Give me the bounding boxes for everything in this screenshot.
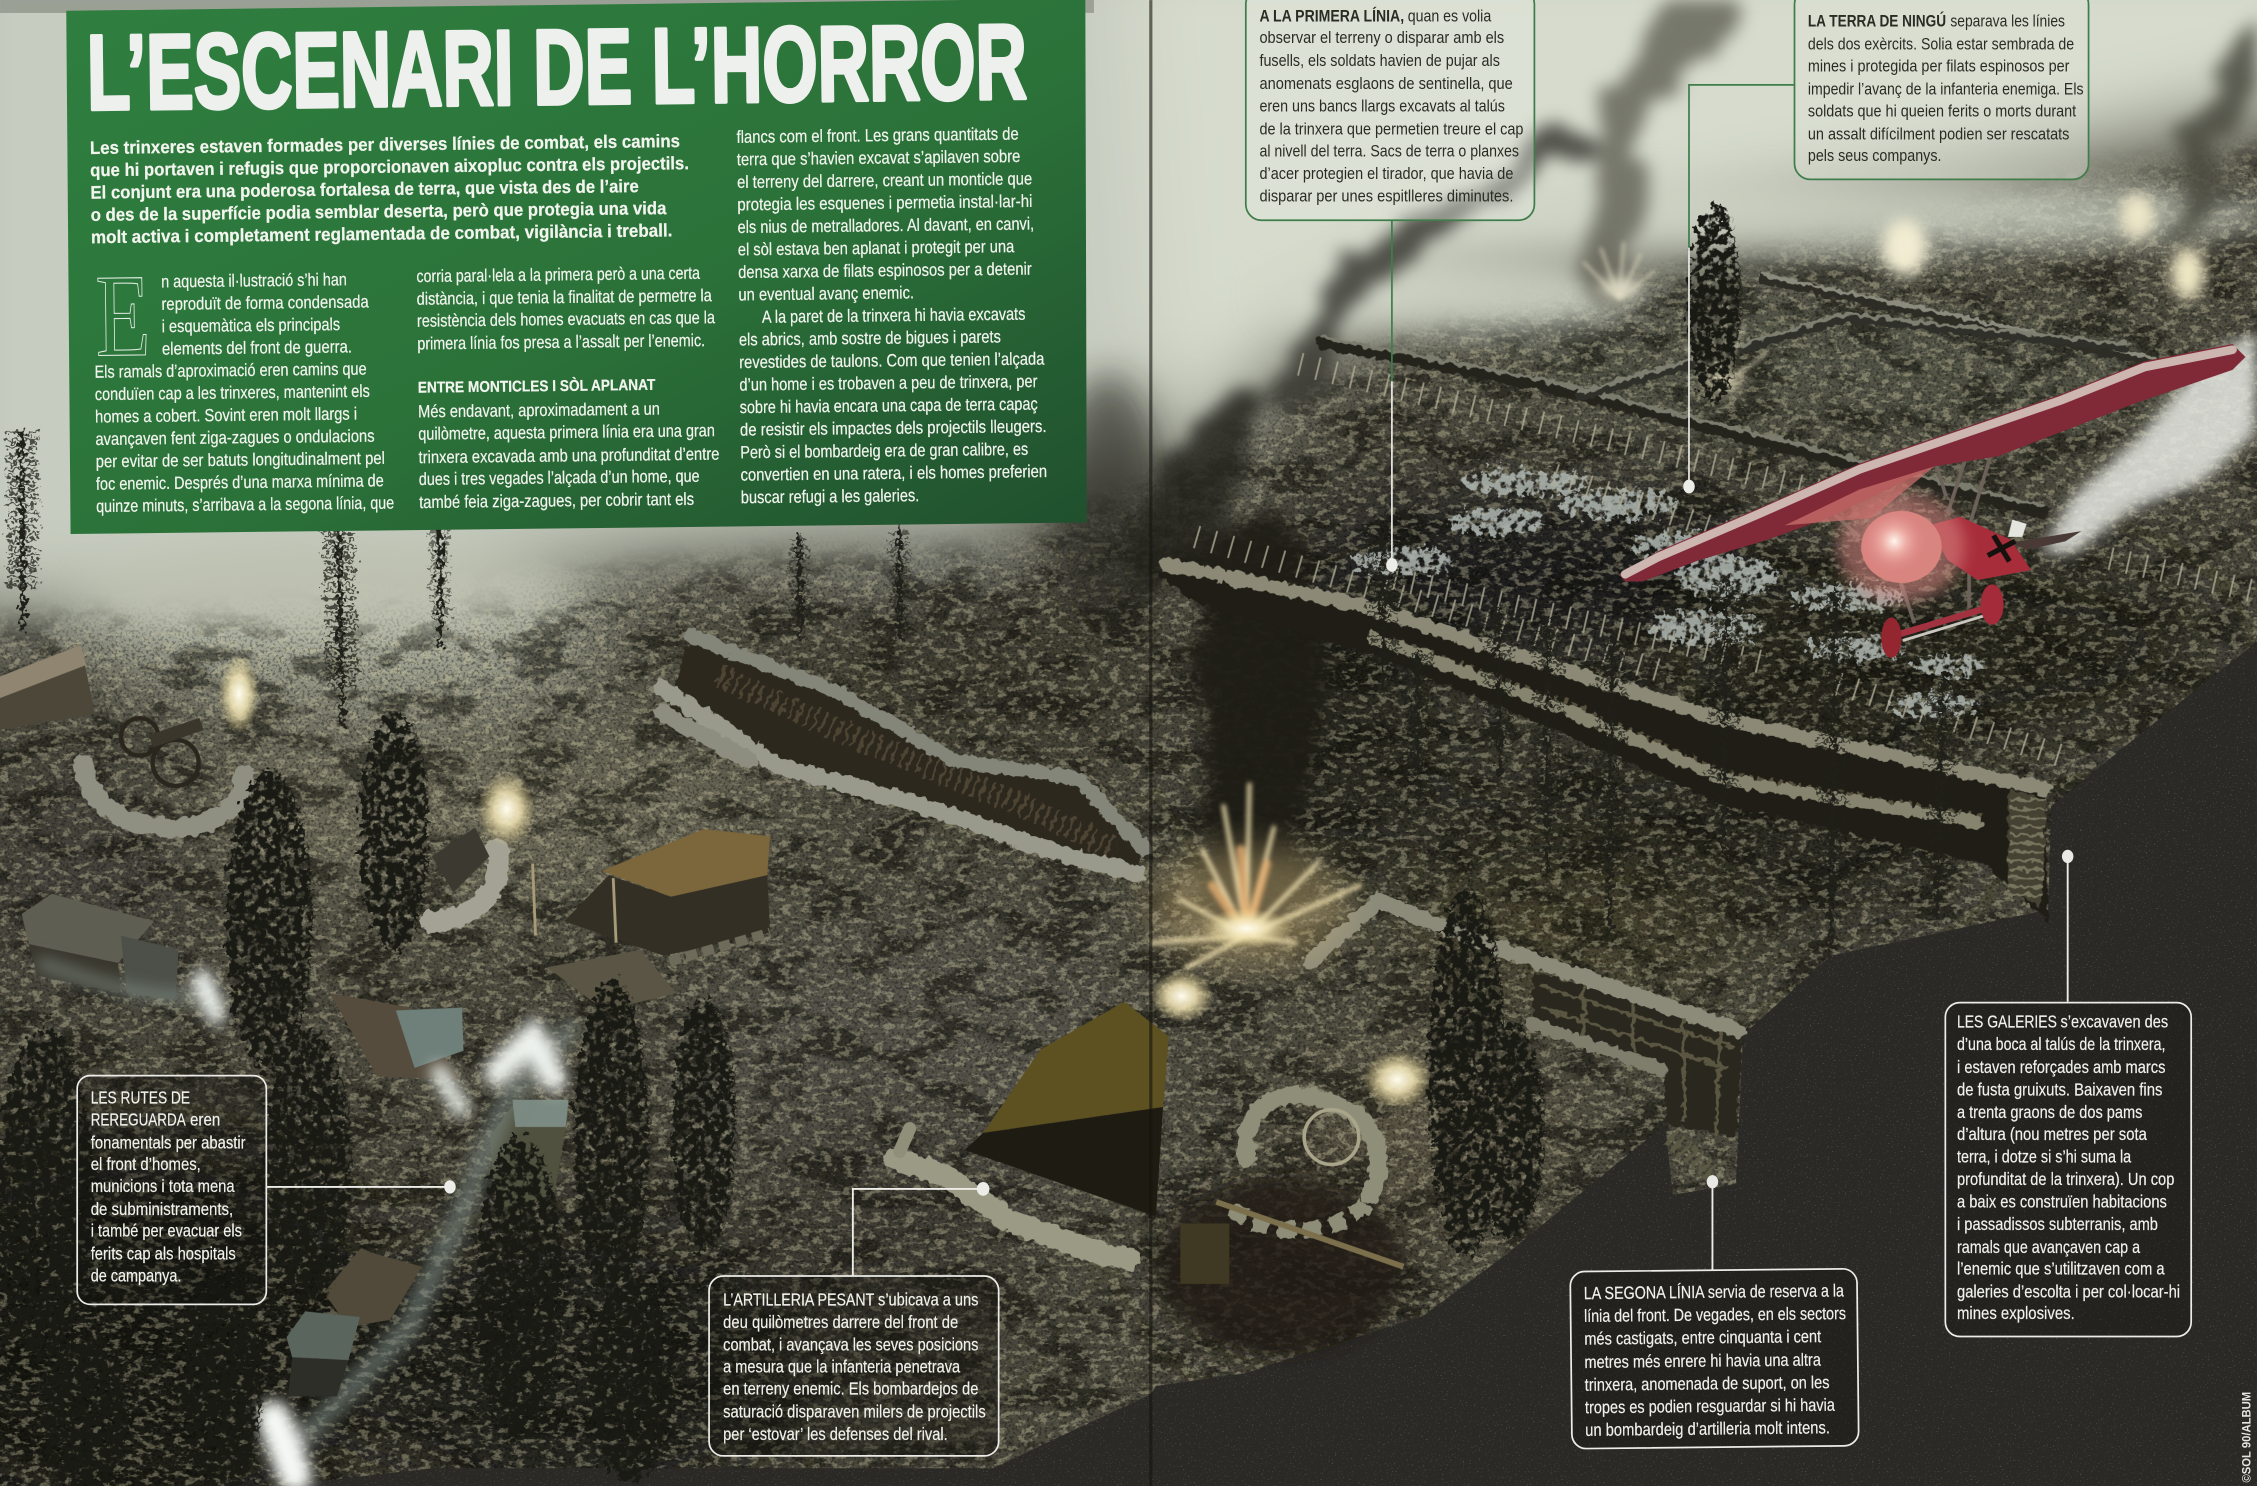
callout: les galeries: profunditat de la trinxera). Un cop xyxy=(1957,1169,2175,1189)
callout: les galeries: d’altura (nou metres per sota xyxy=(1957,1124,2147,1144)
column 1: elements del front de guerra. xyxy=(162,336,352,359)
callout: l'artilleria pesant: a mesura que la infanteria penetrava xyxy=(723,1357,960,1377)
callout: l'artilleria pesant: combat, i avançava les seves posicions xyxy=(723,1335,979,1355)
struts xyxy=(1819,443,1992,623)
callout: la segona línia: servia de reserva a la xyxy=(1708,1280,1844,1302)
column 1: foc enemic. Després d’una marxa mínima de xyxy=(96,470,384,494)
far trenches xyxy=(1321,275,2155,512)
column 1: Els ramals d’aproximació eren camins que xyxy=(94,359,367,382)
column 3: els abrics, amb sostre de bigues i parets xyxy=(739,326,1001,350)
callout: les rutes de rereguarda: de subministraments, xyxy=(91,1199,233,1219)
pale mud patches in no man's land xyxy=(1354,469,1986,717)
upper wing xyxy=(1619,344,2245,582)
callout: l'artilleria pesant: per ‘estovar’ les defenses del rival. xyxy=(723,1424,948,1444)
column 3 xyxy=(736,123,1047,507)
callout: les rutes de rereguarda: el front d’homes, xyxy=(91,1154,201,1174)
fog over the far fields xyxy=(86,181,2257,630)
intro text xyxy=(90,131,690,247)
callout: les galeries xyxy=(1945,850,2191,1336)
column 3: d’un home i es trobaven a peu de trinxera, per xyxy=(739,371,1038,395)
field gun with sandbags, centre xyxy=(432,828,498,921)
column 3: un eventual avanç enemic. xyxy=(738,282,914,304)
callout: les rutes de rereguarda: eren xyxy=(190,1110,220,1130)
field gun with sandbags, upper left xyxy=(84,718,245,828)
callout: les galeries: LES GALERIES xyxy=(1957,1011,2057,1031)
callout: a la primera línia: quan es volia xyxy=(1408,7,1492,26)
callout: la segona línia: més castigats, entre cinquanta i cent xyxy=(1584,1326,1821,1349)
callout: les galeries: ramals que avançaven cap a xyxy=(1957,1237,2140,1257)
engine glow xyxy=(1838,492,1965,602)
callout: a la primera línia: anomenats esglaons de sentinella, que xyxy=(1259,74,1513,93)
front trench on the right page xyxy=(1152,564,2048,921)
column 1 xyxy=(93,269,394,516)
column 2: ENTRE MONTICLES I SÒL APLANAT xyxy=(418,376,656,397)
column 2: distància, i que tenia la finalitat de permetre la xyxy=(417,285,712,309)
hut, left edge xyxy=(0,645,95,730)
callout: la terra de ningú: separava les línies xyxy=(1950,12,2065,31)
callout: les galeries: a baix es construïen habitacions xyxy=(1957,1192,2167,1212)
cypress trees xyxy=(0,202,1742,1486)
second line trench near the cut xyxy=(1310,901,1743,1173)
callout: les rutes de rereguarda: de campanya. xyxy=(91,1266,181,1286)
callout: les galeries: a trenta graons de dos pams xyxy=(1957,1102,2143,1122)
intro text: Les trinxeres estaven formades per diverses línies de combat, els camins xyxy=(90,131,680,158)
photo credit: ©SOL 90/ALBUM xyxy=(2239,1392,2253,1483)
tent and sandbag wall near the spine xyxy=(895,1002,1169,1259)
callout: la terra de ningú: pels seus companys. xyxy=(1808,146,1941,165)
callout: a la primera línia: fusells, els soldats havien de pujar als xyxy=(1259,51,1500,70)
column 3: protegia les esquenes i permetia instal·lar-hi xyxy=(737,191,1032,214)
column 2: Més endavant, aproximadament a un xyxy=(418,399,660,421)
callout: la segona línia: línia del front. De vegades, en els sectors xyxy=(1584,1303,1846,1326)
column 3: densa xarxa de filats espinosos per a detenir xyxy=(738,259,1032,282)
callout: les galeries: galeries d’escolta i per col·locar-hi xyxy=(1957,1281,2180,1301)
column 3: el sòl estava ben aplanat i protegit per una xyxy=(738,236,1015,259)
callout: l'artilleria pesant: L’ARTILLERIA PESANT xyxy=(723,1290,875,1310)
callout: les galeries: de fusta gruixuts. Baixaven fins xyxy=(1957,1079,2163,1099)
column 3: sobre hi havia encara una capa de terra capaç xyxy=(740,394,1038,417)
callout: a la primera línia: disparar per unes espitlleres diminutes. xyxy=(1259,187,1513,206)
column 3: buscar refugi a les galeries. xyxy=(741,485,919,507)
tent with camouflage net, left xyxy=(533,829,770,1010)
callout: a la primera línia: A LA PRIMERA LÍNIA, xyxy=(1259,7,1404,26)
tail and rudder xyxy=(2011,531,2081,550)
callout: la terra de ningú: soldats que hi queien ferits o morts durant xyxy=(1808,102,2076,121)
column 3: de resistir els impactes dels projectils lleugers. xyxy=(740,416,1047,440)
column 2: quilòmetre, aquesta primera línia era una gran xyxy=(418,420,715,444)
bottom truck xyxy=(286,1249,422,1396)
title: L’ESCENARI DE L’HORROR xyxy=(86,2,1028,132)
callout: la segona línia: un bombardeig d’artilleria molt intens. xyxy=(1585,1417,1830,1440)
intro text: El conjunt era una poderosa fortalesa de terra, que vista des de l’aire xyxy=(90,176,639,203)
callout: a la primera línia: de la trinxera que permetien treure el cap xyxy=(1259,119,1523,138)
column 3: convertien en una ratera, i els homes preferien xyxy=(740,461,1047,485)
column 1: homes a cobert. Sovint eren molt llargs i xyxy=(95,403,357,427)
white smoke behind the plane xyxy=(2040,331,2257,554)
callout: l'artilleria pesant xyxy=(709,1182,999,1456)
column 2 xyxy=(416,263,720,512)
smoke columns xyxy=(1159,0,2257,878)
callout: la terra de ningú: dels dos exèrcits. Solia estar sembrada de xyxy=(1808,34,2074,53)
muzzle flashes xyxy=(219,653,1432,1108)
callout: la terra de ningú: un assalt difícilment podien ser rescatats xyxy=(1808,124,2069,143)
callout: la terra de ningú xyxy=(1683,0,2089,493)
column 2: dues i tres vegades l’alçada d’un home, que xyxy=(419,466,700,489)
column 1: quinze minuts, s’arribava a la segona línia, que xyxy=(96,493,394,516)
intro text: molt activa i completament reglamentada de combat, vigilància i treball. xyxy=(91,220,673,247)
callout: les galeries: i passadissos subterranis, amb xyxy=(1957,1214,2158,1234)
callout: les galeries: mines explosives. xyxy=(1957,1303,2075,1323)
callout: l'artilleria pesant: s’ubicava a uns xyxy=(878,1290,979,1310)
callout: les rutes de rereguarda: fonamentals per abastir xyxy=(91,1132,246,1152)
column 3: els nius de metralladores. Al davant, en canvi, xyxy=(737,213,1034,237)
bare poplars xyxy=(22,432,1943,950)
column 3: Però si el bombardeig era de gran calibre, es xyxy=(740,439,1028,462)
intro text: que hi portaven i refugis que proporcionaven aixopluc contra els projectils. xyxy=(90,153,689,180)
callout: a la primera línia xyxy=(1246,0,1534,572)
column 1: per evitar de ser batuts longitudinalment pel xyxy=(96,448,385,471)
gun emplacement and debris xyxy=(1159,1095,1403,1356)
column 3: revestides de taulons. Com que tenien l’alçada xyxy=(739,348,1045,372)
truck at the road bend xyxy=(489,1100,569,1209)
callout: a la primera línia: eren uns bancs llargs excavats al talús xyxy=(1259,97,1505,116)
intro text: o des de la superfície podia semblar deserta, però que protegia una vida xyxy=(91,198,667,225)
drop cap: E xyxy=(95,250,151,381)
column 2: resistència dels homes evacuats en cas que la xyxy=(417,307,715,331)
callout: la terra de ningú: mines i protegida per filats espinosos per xyxy=(1808,57,2070,76)
callout: les rutes de rereguarda: i també per evacuar els xyxy=(91,1220,242,1240)
column 2: corria paral·lela a la primera però a una certa xyxy=(416,263,700,286)
column 3: el terreny del darrere, creant un monticle que xyxy=(737,168,1032,192)
column 1: i esquemàtica els principals xyxy=(162,314,340,336)
barbed wire stakes xyxy=(1196,364,2257,760)
callout: l'artilleria pesant: saturació disparaven milers de projectils xyxy=(723,1401,986,1421)
callout: la segona línia: tropes es podien resguardar si hi havia xyxy=(1585,1395,1835,1417)
road with headlights xyxy=(43,964,569,1475)
fuselage cross xyxy=(1988,535,2015,561)
callout: l'artilleria pesant: deu quilòmetres darrere del front de xyxy=(723,1312,958,1332)
callout: les rutes de rereguarda xyxy=(77,1076,456,1304)
craters and small explosions xyxy=(1583,242,1768,386)
callout: la terra de ningú: LA TERRA DE NINGÚ xyxy=(1808,12,1946,31)
panel: intro green box xyxy=(66,0,1087,534)
column 2: també feia ziga-zagues, per cobrir tant els xyxy=(419,489,694,512)
callout: la terra de ningú: impedir l’avanç de la infanteria enemiga. Els xyxy=(1808,79,2084,98)
magazine spine xyxy=(1150,0,1152,1486)
callout: les rutes de rereguarda: REREGUARDA xyxy=(91,1110,186,1130)
column 3: A la paret de la trinxera hi havia excavats xyxy=(762,304,1026,327)
callout: la segona línia: trinxera, anomenada de suport, on les xyxy=(1585,1372,1830,1395)
callout: la segona línia xyxy=(1570,1175,1859,1449)
callout: les rutes de rereguarda: ferits cap als hospitals xyxy=(91,1243,236,1263)
column 1: reproduït de forma condensada xyxy=(161,291,369,314)
rear trench on the left page xyxy=(662,636,1144,874)
dark cross-section soil xyxy=(259,642,2257,1486)
covered truck xyxy=(22,894,179,1000)
column 2: trinxera excavada amb una profunditat d’entre xyxy=(418,444,720,467)
callout: a la primera línia: observar el terreny o disparar amb els xyxy=(1259,28,1504,47)
callout: la segona línia: LA SEGONA LÍNIA xyxy=(1584,1282,1705,1303)
red fighter aircraft xyxy=(1619,344,2245,658)
landing gear xyxy=(1881,584,2004,658)
column 1: avançaven fent ziga-zagues o ondulacions xyxy=(95,426,375,449)
callout: les galeries: terra, i dotze si s’hi suma la xyxy=(1957,1147,2131,1167)
fuselage xyxy=(1929,517,2031,580)
callout: la segona línia: metres més enrere hi havia una altra xyxy=(1584,1349,1821,1372)
callout: les rutes de rereguarda: LES RUTES DE xyxy=(91,1087,190,1107)
callout: les galeries: s’excavaven des xyxy=(2060,1011,2168,1031)
callout: les galeries: d’una boca al talús de la trinxera, xyxy=(1957,1034,2165,1054)
column 1: n aquesta il·lustració s’hi han xyxy=(161,269,347,291)
column 1: conduïen cap a les trinxeres, mantenint els xyxy=(95,381,370,404)
loaded truck xyxy=(330,993,464,1080)
panel text rotated with the page xyxy=(86,2,1047,516)
column 3: terra que s’havien excavat s’apilaven sobre xyxy=(737,146,1020,169)
callout: les galeries: l’enemic que s’utilitzaven com a xyxy=(1957,1259,2165,1279)
callout: les galeries: i estaven reforçades amb marcs xyxy=(1957,1057,2166,1077)
callout: a la primera línia: d’acer protegien el tirador, que havia de xyxy=(1259,164,1513,183)
callout: les rutes de rereguarda: municions i tota mena xyxy=(91,1176,235,1196)
central explosion xyxy=(1149,784,1360,967)
column 2: primera línia fos presa a l’assalt per l’enemic. xyxy=(417,330,705,353)
callout: a la primera línia: al nivell del terra. Sacs de terra o planxes xyxy=(1259,142,1519,161)
column 3: flancs com el front. Les grans quantitats de xyxy=(736,124,1019,147)
callout: l'artilleria pesant: en terreny enemic. Els bombardejos de xyxy=(723,1379,978,1399)
